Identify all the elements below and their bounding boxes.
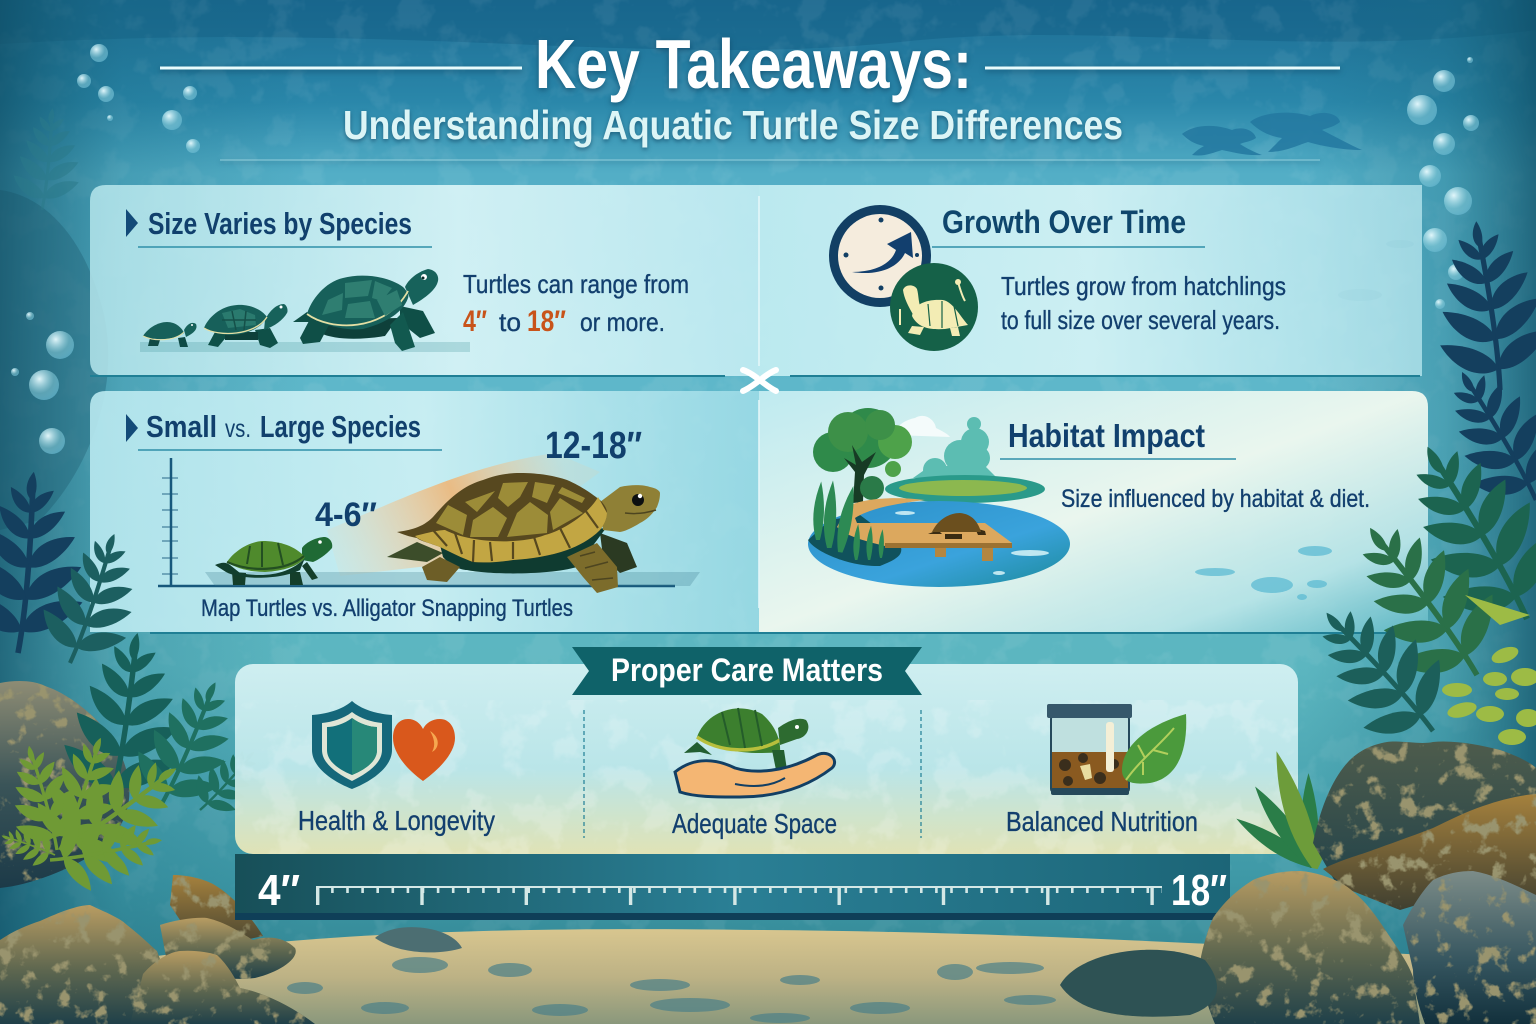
panel: small vs large species [90, 391, 759, 632]
icon: shield and heart [312, 701, 455, 789]
banner: Proper Care Matters [611, 652, 883, 688]
text: size range: or more. [580, 307, 665, 337]
text: size range [463, 269, 689, 338]
shell [397, 473, 607, 562]
distant turtle silhouettes [1182, 113, 1362, 156]
large turtle [387, 473, 660, 593]
text: growth [1001, 271, 1286, 335]
scutes [436, 482, 585, 537]
heading: small vs large: Small [146, 409, 217, 444]
distant hills [913, 417, 997, 484]
heading: size varies: Size Varies by Species [148, 206, 412, 241]
text: growth: to full size over several years. [1001, 305, 1280, 335]
label: space: Adequate Space [672, 808, 837, 839]
tree [813, 408, 912, 503]
label: 18 inches: 18″ [1171, 866, 1227, 915]
icon: turtle on hand [675, 708, 835, 797]
text: size range: 18″ [527, 305, 566, 338]
plants: left [0, 105, 275, 900]
icon: turtle badge [890, 263, 978, 351]
reeds [813, 480, 884, 560]
text: size range: Turtles can range from [463, 269, 689, 299]
text: size range: to [499, 307, 521, 337]
panel: proper care matters [235, 647, 1298, 854]
rocks: right [1200, 742, 1536, 1024]
front foot [567, 543, 618, 593]
wooden dock [837, 498, 1012, 561]
back foot [422, 557, 460, 582]
ground shadow [205, 572, 700, 586]
pond water [808, 501, 1070, 587]
subtitle: Understanding Aquatic Turtle Size Differences [343, 102, 1123, 148]
label: 4 inches: 4″ [258, 866, 300, 915]
heading: small vs large: Large Species [260, 409, 421, 444]
divider with ribbon cross [90, 196, 1430, 633]
bubbles [11, 44, 1479, 454]
tail leg [387, 542, 443, 562]
icon: jar and leaf [1047, 704, 1186, 795]
banner [572, 647, 922, 695]
title: Key Takeaways: [535, 25, 972, 103]
text: size range: 4″ [463, 305, 487, 338]
small seaweed near ruler [1231, 749, 1341, 872]
label: nutrition: Balanced Nutrition [1006, 806, 1198, 837]
far island [885, 475, 1045, 503]
panel: growth over time [759, 185, 1422, 376]
small turtle [143, 322, 197, 347]
heading: habitat: Habitat Impact [1008, 417, 1205, 454]
chart axis [158, 458, 675, 586]
label: 12-18 inches: 12-18″ [545, 425, 642, 467]
ripple blobs [1195, 546, 1332, 600]
grassy bank [808, 515, 901, 566]
text: habitat: Size influenced by habitat & diet. [1061, 485, 1370, 513]
icon: three turtles growing [140, 269, 470, 352]
ripples [895, 511, 1049, 575]
sandy seabed [0, 927, 1536, 1024]
medium turtle [204, 304, 288, 348]
head [600, 485, 660, 532]
ruler ticks [316, 887, 1162, 896]
heading: growth over time: Growth Over Time [942, 204, 1186, 240]
text: growth: Turtles grow from hatchlings [1001, 271, 1286, 301]
caption: species: Map Turtles vs. Alligator Snapping Turtles [201, 595, 573, 622]
motion trail [327, 453, 600, 576]
rock: foreground dark [1060, 950, 1217, 1017]
heading: size varies [126, 206, 432, 247]
panel: habitat impact [759, 391, 1428, 632]
icon: clock with growth arrow [829, 205, 931, 307]
far front leg [600, 533, 637, 573]
small turtle [215, 537, 332, 585]
heading: small vs large: vs. [225, 415, 251, 443]
belly [440, 528, 606, 573]
shell margin [415, 497, 607, 562]
large turtle [293, 269, 438, 351]
ruler band [235, 854, 1230, 920]
label: 4-6 inches: 4-6″ [315, 496, 377, 534]
bright clover leaves [1442, 595, 1536, 745]
cloud [893, 416, 950, 437]
label: health: Health & Longevity [298, 805, 495, 836]
rocks: left [0, 681, 315, 1024]
panel: size varies by species [90, 185, 759, 376]
turtle on dock [928, 513, 986, 539]
heading: small vs large [126, 409, 442, 450]
illustration: pond habitat [808, 408, 1070, 587]
eye [632, 494, 644, 506]
plants: right [1231, 213, 1536, 872]
